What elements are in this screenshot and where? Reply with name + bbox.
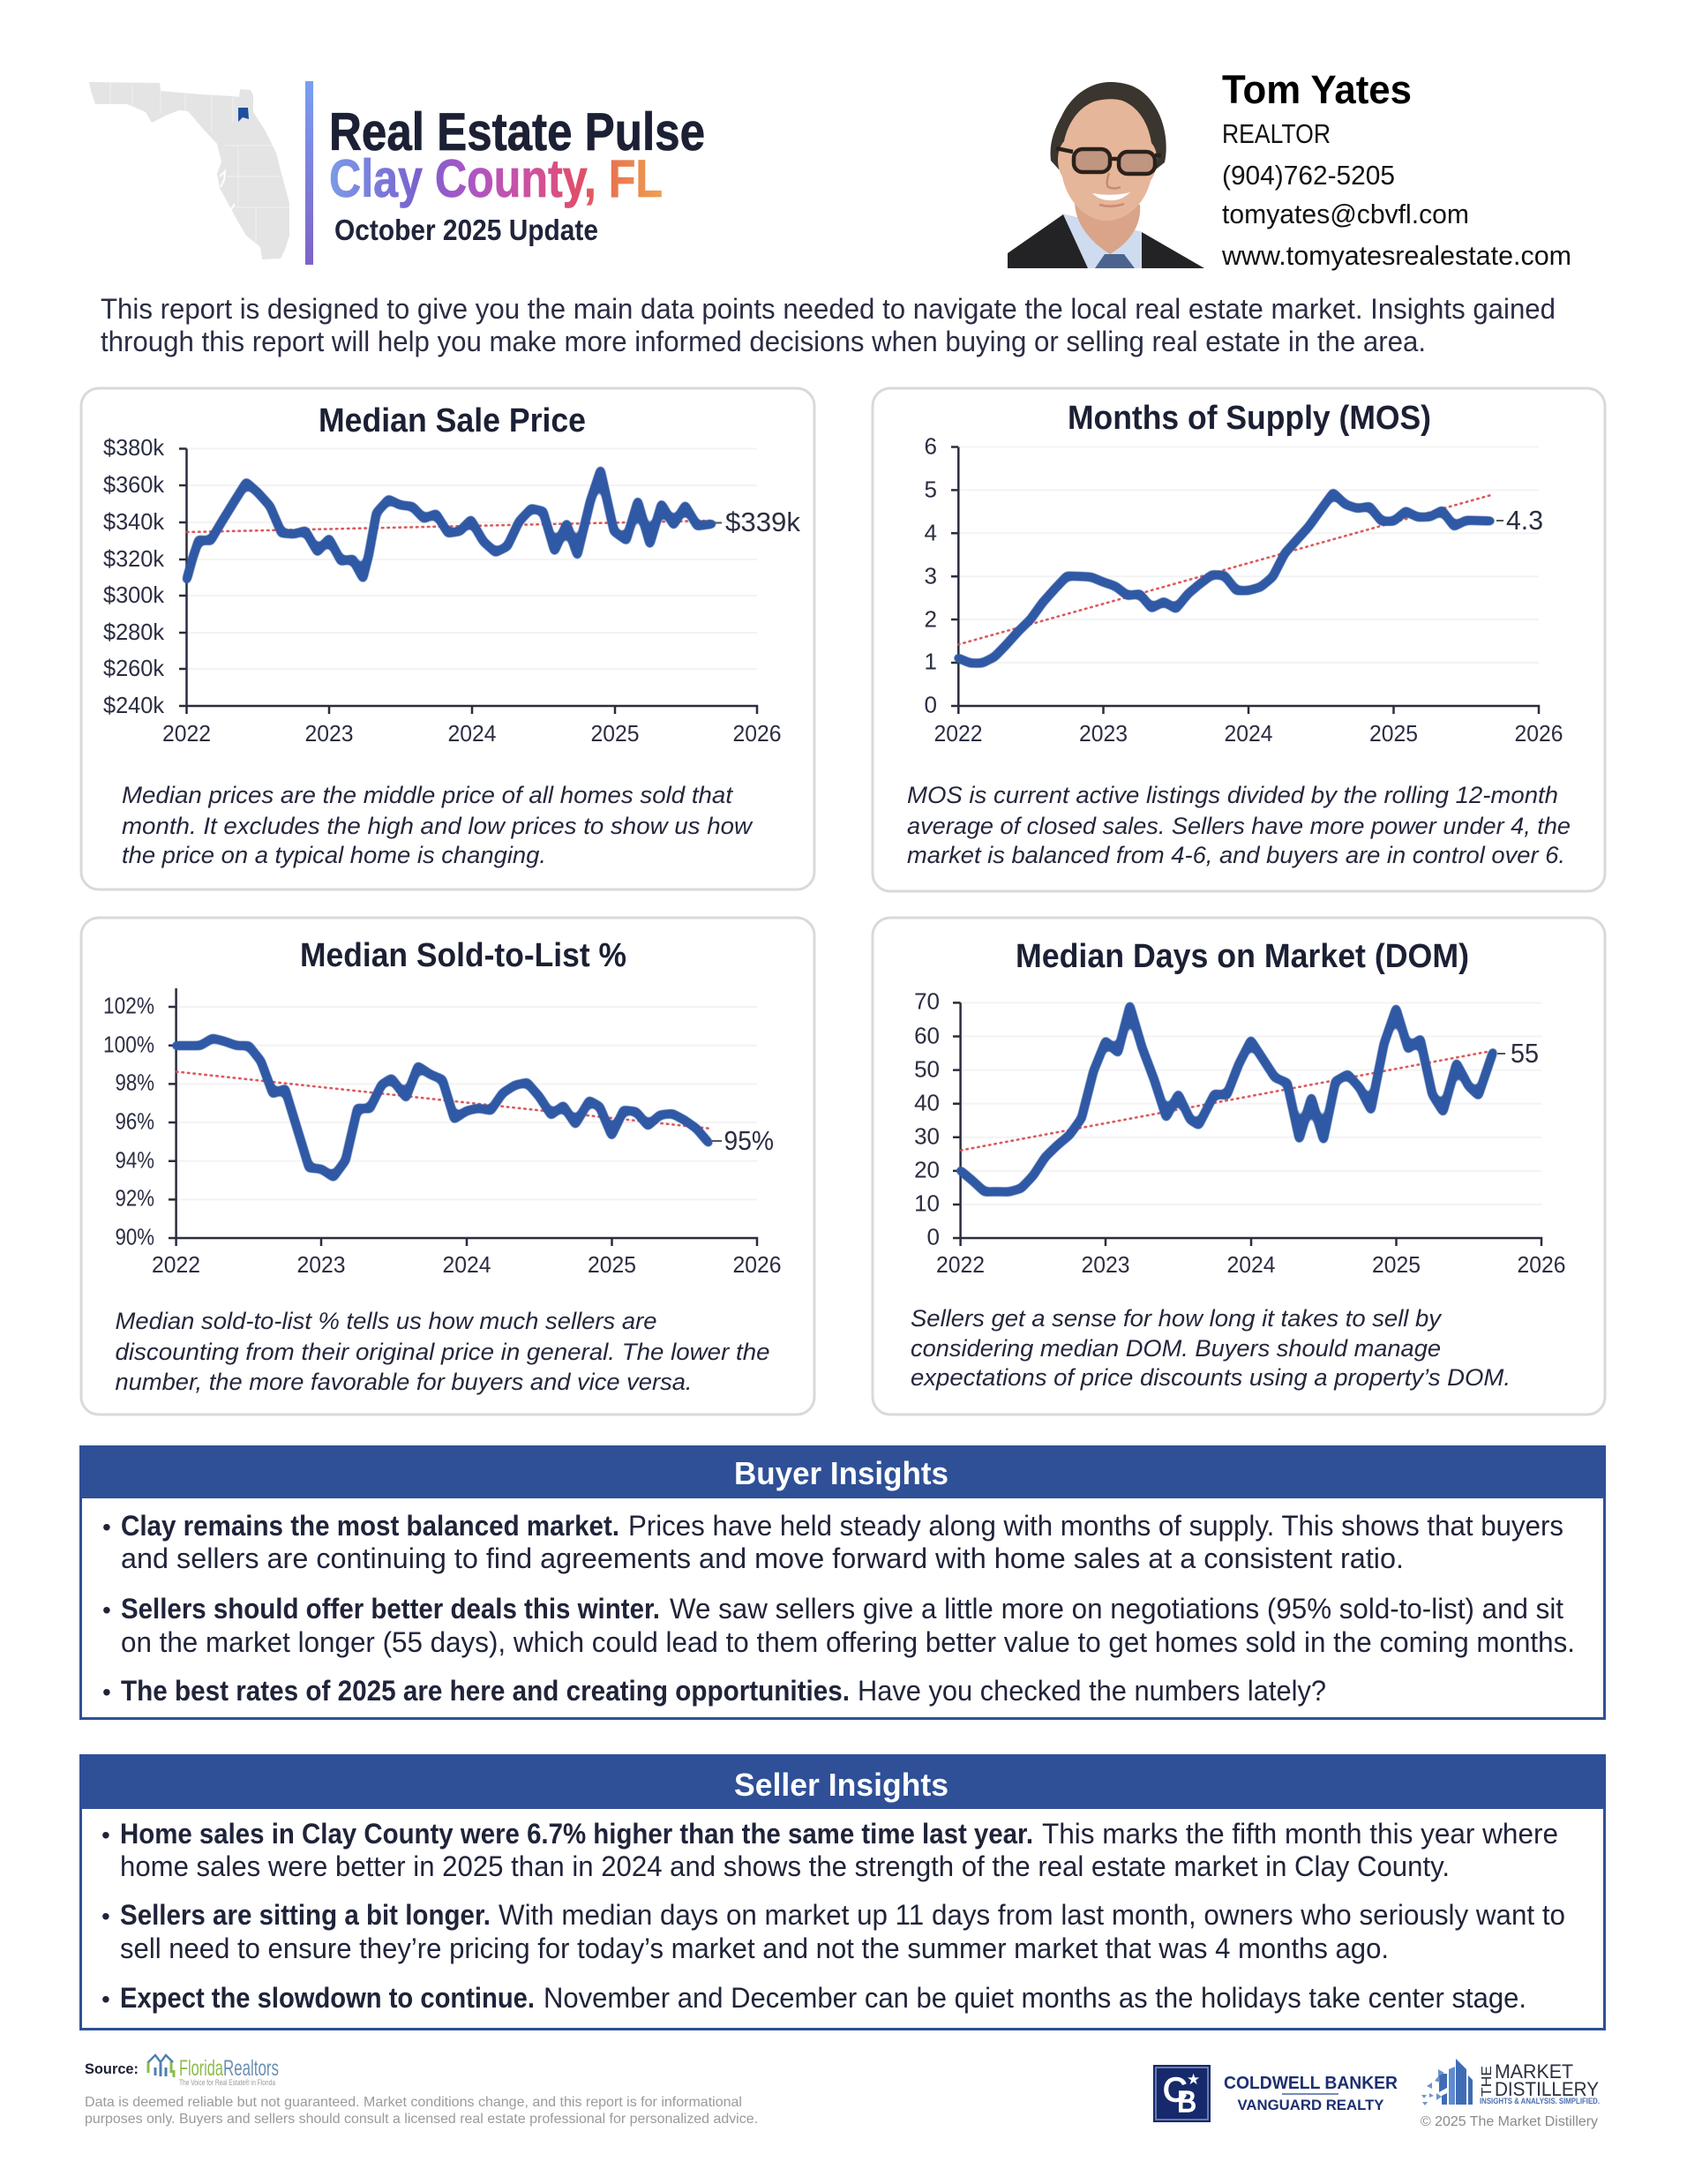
insight: slowdown: Expect the slowdown to continue. [120, 1982, 535, 2014]
chart caption: MOS is current active listings divided by the rolling 12-month [907, 782, 1558, 808]
agent role: REALTOR [1222, 118, 1331, 149]
disclaimer: purposes only. Buyers and sellers should consult a licensed real estate professional for personalized advice. [85, 2112, 758, 2127]
insight: slowdown: • [101, 1985, 110, 2013]
logo: The Market Distillery: MARKET [1495, 2060, 1573, 2083]
phone: (904)762-5205 [1222, 160, 1395, 191]
line chart: median sale price [103, 434, 800, 747]
chart caption: average of closed sales. Sellers have more power under 4, the [907, 813, 1571, 839]
line chart: months of supply: 3 [925, 563, 937, 589]
line chart: sold-to-list: 95% [724, 1125, 774, 1156]
chart caption: number, the more favorable for buyers and vice versa. [115, 1369, 692, 1395]
agent name: Tom Yates [1222, 67, 1412, 112]
logo: Florida Realtors: Realtors [223, 2056, 279, 2081]
disclaimer: Data is deemed reliable but not guaranteed. Market conditions change, and this report is for informational [85, 2095, 742, 2110]
line chart: sold-to-list [103, 988, 782, 1278]
insight: best rates: Have you checked the numbers lately? [858, 1675, 1326, 1707]
title accent bar [305, 81, 313, 265]
logo: Coldwell Banker Vanguard Realty: COLDWELL BANKER [1224, 2074, 1398, 2093]
panel: buyer insights [79, 1445, 1606, 1719]
line chart: sold-to-list: 98% [115, 1069, 154, 1096]
line chart: median sale price: 2024 [448, 720, 496, 747]
insight: sitting longer [101, 1899, 1565, 1964]
insight: slowdown: November and December can be quiet months as the holidays take center stage. [544, 1982, 1526, 2014]
panel header [79, 1445, 1606, 1498]
line chart: days on market: 30 [914, 1122, 940, 1149]
insight: best rates: The best rates of 2025 are here and creating opportunities. [121, 1675, 850, 1707]
line chart: median sale price: $240k [103, 692, 165, 718]
insight: best rates: • [102, 1678, 111, 1706]
line chart: months of supply: 2022 [933, 720, 983, 747]
insight: balanced market: Prices have held steady along with months of supply. This shows that buyers [628, 1510, 1563, 1542]
panel: median sold-to-list [81, 918, 814, 1415]
line chart: median sale price: $300k [103, 582, 165, 608]
line chart: sold-to-list: 96% [115, 1108, 154, 1135]
line chart: months of supply: 2 [925, 605, 937, 632]
insight: home sales higher: Home sales in Clay County were 6.7% higher than the same time last year. [120, 1818, 1033, 1850]
chart caption [122, 782, 754, 868]
panel heading: Buyer Insights [734, 1455, 948, 1491]
logo: The Market Distillery: INSIGHTS & ANALYSIS. SIMPLIFIED. [1480, 2097, 1600, 2105]
disclaimer [85, 2095, 758, 2127]
line chart: sold-to-list: 102% [103, 992, 154, 1018]
line chart: months of supply [925, 432, 1563, 747]
line chart: sold-to-list: 2024 [443, 1251, 491, 1278]
line chart: days on market: 2025 [1372, 1251, 1421, 1278]
chart caption [115, 1308, 770, 1395]
insight: sitting longer: With median days on market up 11 days from last month, owners who seriously want to [499, 1899, 1565, 1931]
insight: better deals: • [102, 1596, 111, 1624]
intro text: This report is designed to give you the main data points needed to navigate the local real estate market. Insights gained [101, 293, 1556, 325]
icon: Florida county map [89, 82, 289, 259]
logo: Florida Realtors [148, 2055, 279, 2087]
logo: Coldwell Banker Vanguard Realty: VANGUARD REALTY [1237, 2097, 1384, 2113]
line chart: months of supply: 2023 [1079, 720, 1128, 747]
line chart: days on market: 10 [914, 1190, 940, 1216]
insight: sitting longer: Sellers are sitting a bit longer. [120, 1899, 491, 1931]
panel: seller insights [79, 1754, 1606, 2030]
insight: best rates [102, 1675, 1326, 1707]
insight: balanced market: Clay remains the most balanced market. [121, 1510, 619, 1542]
panel: median days on market [873, 918, 1605, 1415]
subheading: update date: October 2025 Update [334, 214, 598, 246]
line chart: days on market: 0 [927, 1223, 940, 1250]
heading: Clay County, FL: Clay County, FL [329, 149, 663, 208]
panel header [79, 1754, 1606, 1809]
line chart: days on market: 55 [1511, 1038, 1539, 1069]
line chart: sold-to-list: 94% [115, 1147, 154, 1174]
line chart: days on market: 2023 [1082, 1251, 1129, 1278]
line chart: median sale price: 2025 [591, 720, 639, 747]
insight: better deals: Sellers should offer better deals this winter. [121, 1593, 660, 1625]
insight: balanced market: • [102, 1513, 111, 1541]
insight: slowdown [101, 1982, 1526, 2014]
insight: home sales higher: This marks the fifth month this year where [1042, 1818, 1558, 1850]
line chart: days on market: 20 [914, 1156, 940, 1182]
chart title: Median Sold-to-List % [300, 937, 626, 974]
line chart: months of supply: 6 [925, 432, 937, 459]
line chart: months of supply: 2024 [1225, 720, 1272, 747]
chart title: Months of Supply (MOS) [1068, 400, 1431, 437]
insight: balanced market: and sellers are continuing to find agreements and move forward with home sales at a consistent ratio. [121, 1542, 1404, 1574]
chart caption: month. It excludes the high and low prices to show us how [122, 813, 754, 839]
line chart: median sale price: $360k [103, 471, 165, 498]
photo: agent portrait [1008, 82, 1204, 268]
chart caption: discounting from their original price in general. The lower the [115, 1339, 770, 1365]
insight: better deals [102, 1593, 1575, 1658]
source label: Source: [85, 2060, 139, 2077]
line chart: months of supply: 4.3 [1506, 505, 1543, 536]
logo: The Market Distillery [1421, 2059, 1600, 2129]
line chart: days on market: 2024 [1226, 1251, 1276, 1278]
chart caption: market is balanced from 4-6, and buyers are in control over 6. [907, 842, 1565, 868]
line chart: days on market [914, 988, 1565, 1278]
panel heading: Seller Insights [734, 1767, 948, 1803]
line chart: days on market: 2022 [936, 1251, 985, 1278]
insight: sitting longer: • [101, 1903, 110, 1930]
insight: better deals: on the market longer (55 days), which could lead to them offering better value to get homes sold in the coming months. [121, 1626, 1575, 1658]
chart caption [911, 1305, 1511, 1391]
line chart: days on market: 60 [914, 1022, 940, 1048]
chart title: Median Days on Market (DOM) [1016, 938, 1469, 975]
panel: median sale price [81, 388, 814, 889]
logo: Coldwell Banker Vanguard Realty: C [1163, 2072, 1187, 2109]
logo: Florida Realtors: The Voice for Real Estate® in Florida [179, 2078, 275, 2087]
line chart: days on market: 70 [914, 988, 940, 1015]
line chart: median sale price: $339k [725, 507, 800, 537]
line chart: days on market: 2026 [1518, 1251, 1565, 1278]
line chart: months of supply: 0 [925, 692, 937, 718]
title block [329, 102, 705, 246]
chart caption: expectations of price discounts using a property’s DOM. [911, 1364, 1511, 1391]
line chart: sold-to-list: 92% [115, 1184, 154, 1211]
chart caption: considering median DOM. Buyers should manage [911, 1335, 1441, 1362]
line chart: months of supply: 2026 [1514, 720, 1563, 747]
insight: better deals: We saw sellers give a little more on negotiations (95% sold-to-list) and sit [670, 1593, 1563, 1625]
logo: The Market Distillery: DISTILLERY [1495, 2078, 1599, 2100]
intro text [101, 293, 1556, 357]
logo: Florida Realtors: Florida [179, 2056, 223, 2081]
logo: The Market Distillery: THE [1480, 2066, 1495, 2097]
line chart: sold-to-list: 2025 [588, 1251, 636, 1278]
chart caption: Median prices are the middle price of all homes sold that [122, 782, 734, 808]
panel: months of supply [873, 388, 1605, 891]
line chart: median sale price: $260k [103, 655, 165, 681]
line chart: sold-to-list: 90% [115, 1223, 154, 1250]
line chart: months of supply: 4 [925, 519, 937, 545]
line chart: days on market: 50 [914, 1055, 940, 1082]
logo: Coldwell Banker Vanguard Realty: B [1177, 2085, 1196, 2118]
line chart: median sale price: 2023 [305, 720, 353, 747]
line chart: median sale price: $340k [103, 508, 165, 535]
contact details [1221, 67, 1571, 271]
insight: balanced market [102, 1510, 1563, 1574]
line chart: months of supply: 1 [925, 648, 937, 674]
chart title: Median Sale Price [319, 402, 586, 439]
website: www.tomyatesrealestate.com [1221, 240, 1571, 271]
chart caption: Sellers get a sense for how long it takes to sell by [911, 1305, 1443, 1332]
line chart: sold-to-list: 2022 [152, 1251, 200, 1278]
chart caption [907, 782, 1571, 868]
line chart: months of supply: 5 [925, 477, 937, 503]
line chart: median sale price: 2026 [732, 720, 782, 747]
chart caption: the price on a typical home is changing. [122, 842, 546, 868]
line chart: median sale price: $320k [103, 545, 165, 572]
heading: Real Estate Pulse: Real Estate Pulse [329, 102, 705, 161]
line chart: median sale price: $280k [103, 619, 165, 645]
line chart: sold-to-list: 2023 [296, 1251, 346, 1278]
email: tomyates@cbvfl.com [1222, 199, 1469, 229]
insight: home sales higher: home sales were better in 2025 than in 2024 and shows the strength of the real estate market in Clay County. [120, 1850, 1450, 1882]
line chart: median sale price: 2022 [162, 720, 211, 747]
line chart: sold-to-list: 100% [103, 1031, 154, 1057]
line chart: sold-to-list: 2026 [732, 1251, 782, 1278]
line chart: median sale price: $380k [103, 434, 165, 461]
line chart: days on market: 40 [914, 1089, 940, 1115]
insight: home sales higher: • [101, 1821, 110, 1849]
insight: home sales higher [101, 1818, 1558, 1882]
copyright: © 2025 The Market Distillery [1421, 2114, 1598, 2129]
chart caption: Median sold-to-list % tells us how much sellers are [115, 1308, 656, 1334]
insight: sitting longer: sell need to ensure they’re pricing for today’s market and not the summer market that was 4 months ago. [120, 1933, 1389, 1964]
logo: Coldwell Banker Vanguard Realty: ★ [1187, 2071, 1200, 2089]
line chart: months of supply: 2025 [1369, 720, 1418, 747]
logo: Coldwell Banker Vanguard Realty [1153, 2065, 1398, 2122]
intro text: through this report will help you make more informed decisions when buying or selling real estate in the area. [101, 326, 1426, 357]
